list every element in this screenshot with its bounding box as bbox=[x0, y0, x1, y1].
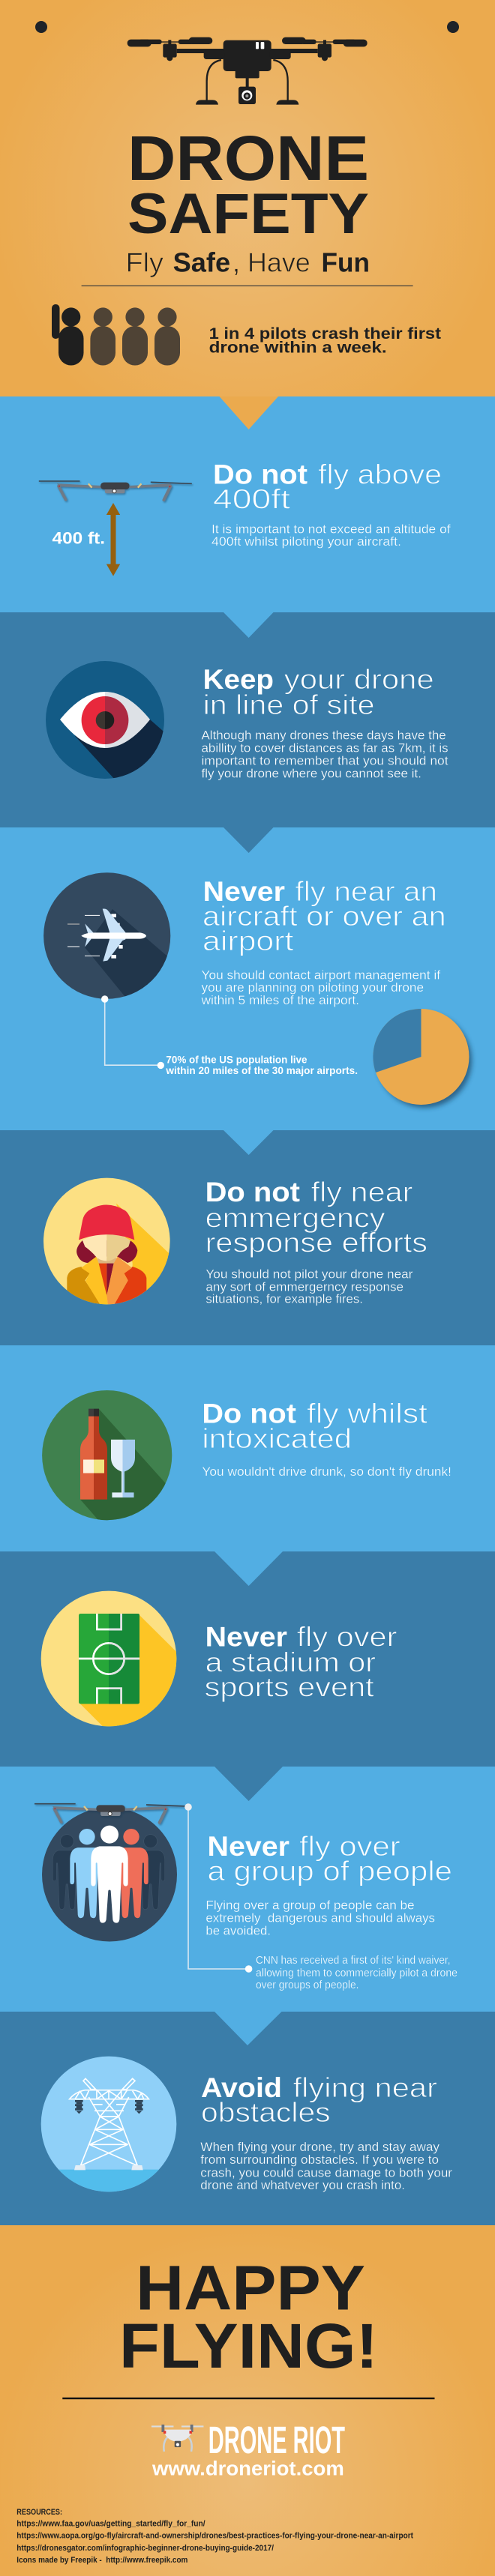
heading: a stadium or bbox=[206, 1646, 376, 1677]
body text: Flying over a group of people can be bbox=[206, 1898, 415, 1913]
body text bbox=[201, 728, 448, 781]
subtitle: Fly bbox=[126, 247, 164, 277]
subtitle: , bbox=[232, 247, 240, 277]
closing title: FLYING! bbox=[119, 2311, 378, 2381]
icon: group of people under drone bbox=[34, 1804, 188, 1941]
logo: drone icon bbox=[152, 2425, 203, 2452]
panel: do not fly near emergency efforts bbox=[0, 1130, 495, 1345]
heading: flying near bbox=[293, 2072, 437, 2103]
body text: fly your drone where you cannot see it. bbox=[201, 766, 422, 781]
body text: Although many drones these days have the bbox=[201, 728, 446, 742]
connector line bbox=[101, 995, 164, 1069]
callout: 70 percent statistic: within 20 miles of the 30 major airports. bbox=[165, 1065, 358, 1076]
heading: Avoid bbox=[201, 2072, 282, 2103]
body text bbox=[212, 522, 451, 549]
panel: do not fly above 400ft bbox=[0, 396, 495, 612]
resources: https://dronesgator.com/infographic-beginner-drone-buying-guide-2017/ bbox=[16, 2544, 274, 2553]
heading bbox=[213, 458, 442, 515]
icon: airplane bbox=[44, 872, 171, 1004]
heading bbox=[202, 875, 446, 956]
heading bbox=[206, 1176, 428, 1258]
title: SAFETY bbox=[128, 182, 369, 246]
icon: black drone bbox=[128, 37, 368, 105]
body text: drone and whatvever you crash into. bbox=[200, 2178, 405, 2192]
heading: Never bbox=[203, 875, 285, 907]
connector line bbox=[184, 1803, 252, 1973]
arrow: 400 ft height bbox=[106, 503, 120, 576]
heading: Do not bbox=[202, 1398, 297, 1429]
title bbox=[128, 123, 369, 246]
heading: aircraft or over an bbox=[202, 900, 446, 932]
subtitle: Have bbox=[248, 247, 310, 277]
icon: wine bottle and glass bbox=[42, 1390, 176, 1525]
resources bbox=[16, 2508, 413, 2565]
subtitle: Safe bbox=[173, 247, 230, 277]
title: DRONE bbox=[128, 123, 369, 193]
heading: 400ft bbox=[213, 483, 291, 515]
callout: CNN waiver: CNN has received a first of its' kind waiver, bbox=[256, 1955, 451, 1967]
heading: airport bbox=[202, 925, 294, 956]
subtitle: Fun bbox=[321, 247, 370, 277]
heading: fly over bbox=[297, 1620, 398, 1652]
heading bbox=[203, 663, 434, 720]
heading: a group of people bbox=[207, 1855, 452, 1886]
stat: crash rate bbox=[209, 325, 441, 357]
body text: you are planning on piloting your drone bbox=[201, 980, 424, 995]
heading bbox=[202, 1398, 428, 1454]
body text bbox=[206, 1267, 413, 1306]
icon: eye bbox=[46, 661, 169, 779]
icon: firefighter bbox=[44, 1178, 171, 1306]
resources: Icons made by Freepik - http://www.freepik.com bbox=[16, 2556, 188, 2565]
body text: within 5 miles of the airport. bbox=[200, 993, 359, 1007]
heading: sports event bbox=[205, 1671, 374, 1703]
panel: keep your drone in line of sight bbox=[0, 612, 495, 827]
heading: in line of site bbox=[203, 689, 375, 720]
icon: drone bbox=[39, 481, 192, 500]
decorative hole right bbox=[447, 21, 459, 33]
heading: response efforts bbox=[206, 1227, 428, 1258]
body text bbox=[200, 968, 440, 1007]
body text bbox=[206, 1898, 435, 1937]
body text: be avoided. bbox=[206, 1923, 271, 1937]
panel: never fly over a group of people bbox=[0, 1767, 495, 2012]
body text: from surrounding obstacles. If you were to bbox=[200, 2153, 439, 2167]
heading bbox=[201, 2072, 437, 2128]
body text: any sort of emmergerncy response bbox=[206, 1280, 404, 1294]
heading: fly over bbox=[299, 1830, 400, 1862]
panel: never fly over a stadium bbox=[0, 1551, 495, 1767]
body text: You should not pilot your drone near bbox=[206, 1267, 413, 1281]
panel: footer bbox=[0, 2225, 495, 2576]
heading bbox=[205, 1620, 398, 1703]
panel: never fly near an aircraft bbox=[44, 827, 476, 1111]
subtitle bbox=[126, 247, 370, 277]
heading: emmergency bbox=[206, 1202, 386, 1234]
body text: abillity to cover distances as far as 7km, it is bbox=[201, 741, 448, 755]
heading: your drone bbox=[284, 663, 434, 695]
callout: CNN waiver: over groups of people. bbox=[256, 1979, 358, 1991]
heading: fly near an bbox=[296, 875, 437, 907]
resources: https://www.aopa.org/go-fly/aircraft-and-ownership/drones/best-practices-for-flying-your-drone-near-an-airport bbox=[16, 2532, 413, 2541]
callout: 70 percent statistic: 70% of the US population live bbox=[166, 1055, 308, 1066]
heading: Never bbox=[206, 1620, 287, 1652]
heading bbox=[207, 1830, 452, 1886]
stat: crash rate: drone within a week. bbox=[209, 339, 387, 357]
icon: four pilots, one raising a hand bbox=[52, 304, 180, 366]
heading: Do not bbox=[206, 1176, 301, 1207]
heading: intoxicated bbox=[202, 1423, 352, 1454]
panel: do not fly whilst intoxicated bbox=[42, 1390, 450, 1520]
heading: Keep bbox=[203, 663, 274, 695]
heading: obstacles bbox=[201, 2096, 331, 2128]
decorative hole left bbox=[35, 21, 47, 33]
body text: It is important to not exceed an altitude of bbox=[212, 522, 451, 536]
callout: 70 percent statistic bbox=[165, 1055, 358, 1076]
body text: situations, for example fires. bbox=[206, 1292, 363, 1306]
heading: fly above bbox=[318, 458, 442, 489]
body text: crash, you could cause damage to both your bbox=[200, 2165, 452, 2180]
label: 400 ft: 400 ft. bbox=[52, 529, 105, 548]
body text: You wouldn't drive drunk, so don't fly drunk! bbox=[202, 1465, 452, 1479]
body text: extremely dangerous and should always bbox=[206, 1911, 435, 1925]
body text: You should contact airport management if bbox=[201, 968, 440, 982]
body text bbox=[200, 2140, 452, 2192]
panel: avoid flying near obstacles bbox=[0, 2012, 495, 2225]
icon: football pitch bbox=[41, 1591, 178, 1728]
logo: Drone Riot wordmark: DRONE RIOT bbox=[208, 2419, 345, 2461]
panel: header bbox=[0, 0, 495, 397]
icon: electricity pylon bbox=[40, 2057, 178, 2193]
body text: When flying your drone, try and stay away bbox=[200, 2140, 440, 2154]
website url: www.droneriot.com bbox=[152, 2457, 344, 2479]
heading: Never bbox=[207, 1830, 290, 1862]
heading: Do not bbox=[213, 458, 308, 489]
body text: 400ft whilst piloting your aircraft. bbox=[212, 534, 401, 549]
body text: important to remember that you should not bbox=[201, 753, 448, 767]
closing title: HAPPY bbox=[136, 2253, 365, 2323]
resources: RESOURCES: bbox=[16, 2508, 62, 2517]
callout: CNN waiver bbox=[256, 1955, 458, 1991]
pie chart: 70 percent bbox=[373, 1009, 472, 1108]
resources: https://www.faa.gov/uas/getting_started/fly_for_fun/ bbox=[16, 2520, 206, 2529]
heading: fly whilst bbox=[307, 1398, 428, 1429]
callout: CNN waiver: allowing them to commercially pilot a drone bbox=[256, 1967, 458, 1979]
stat: crash rate: 1 in 4 pilots crash their first bbox=[209, 325, 441, 343]
heading: fly near bbox=[311, 1176, 412, 1207]
closing title bbox=[119, 2253, 378, 2381]
